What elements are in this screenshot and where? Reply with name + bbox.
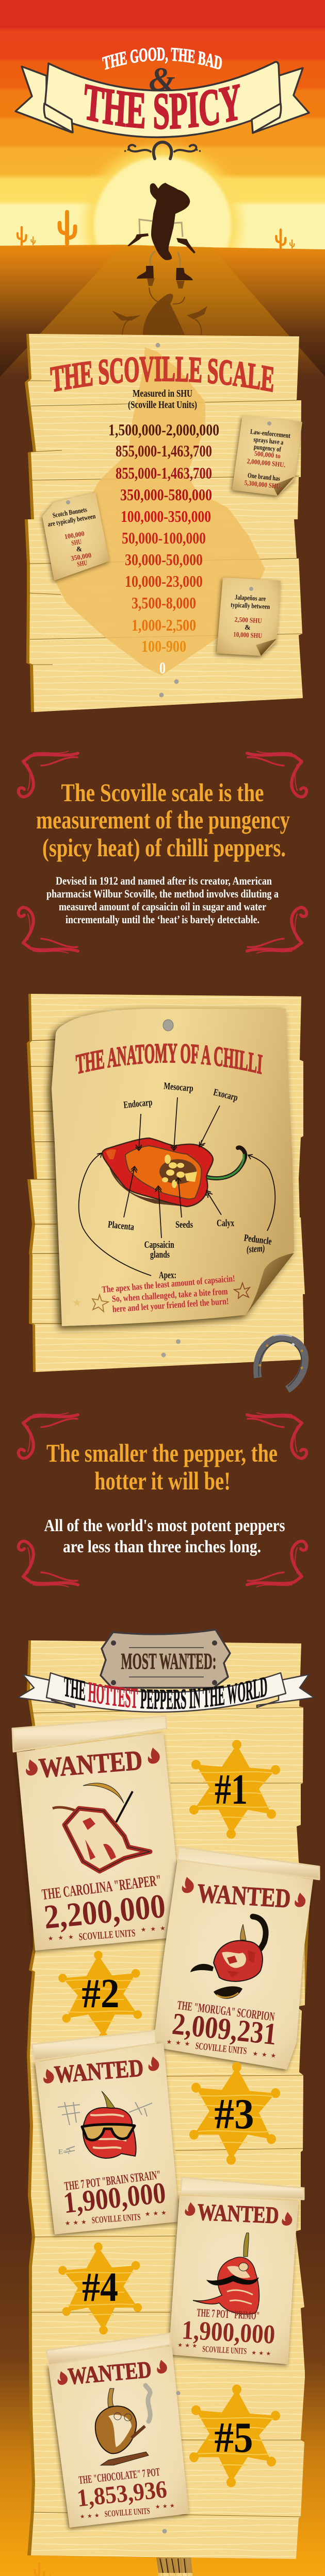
badge: number 3: #3 bbox=[215, 2090, 254, 2138]
labels: (stem) bbox=[246, 1243, 265, 1255]
paragraph: pharmacist Wilbur Scoville, the method involves diluting a bbox=[46, 887, 279, 900]
scale values: 10,000-23,000 bbox=[125, 572, 203, 590]
icon: stars bbox=[73, 1283, 250, 1312]
labels: Exocarp bbox=[213, 1087, 239, 1104]
scale values: 100,000-350,000 bbox=[121, 507, 211, 526]
poster: Chocolate 7 Pot bbox=[46, 2333, 189, 2528]
subheading: Measured in SHU bbox=[133, 388, 192, 399]
heading bbox=[36, 778, 290, 862]
note: Jalapenos: & bbox=[245, 623, 251, 631]
note: law-enforcement sprays bbox=[232, 416, 302, 496]
poster: 7 Pot Primo: WANTED bbox=[197, 2199, 280, 2228]
scale values: 30,000-50,000 bbox=[125, 550, 203, 569]
panel: most wanted wooden sign bbox=[11, 1629, 320, 2559]
nails bbox=[162, 2391, 181, 2534]
labels bbox=[107, 1081, 272, 1281]
note: Jalapenos: typically between bbox=[231, 601, 270, 611]
chilli watermark bbox=[55, 347, 265, 675]
paragraph bbox=[44, 1516, 285, 1556]
icon: cacti on the horizon bbox=[18, 212, 294, 248]
badge: number 4 bbox=[58, 2243, 142, 2334]
apex note: So, when challenged, take a bite from bbox=[111, 1286, 228, 1304]
poster: Moruga Scorpion bbox=[153, 1847, 319, 2070]
pin bbox=[163, 1020, 173, 1031]
badge: number 3 bbox=[189, 2062, 280, 2165]
note: Scotch Bonnets: SHU bbox=[71, 537, 83, 547]
scale values: 1,000-2,500 bbox=[132, 616, 196, 634]
ribbon bbox=[15, 62, 309, 137]
note: Scotch Bonnets: are typically between bbox=[47, 512, 96, 528]
labels: Mesocarp bbox=[163, 1081, 194, 1094]
note: law-enforcement sprays: 2,000,000 SHU. bbox=[247, 457, 286, 469]
paragraph: incrementally until the ‘heat’ is barely detectable. bbox=[66, 913, 259, 926]
paragraph: All of the world's most potent peppers bbox=[44, 1516, 285, 1535]
note: Scotch Bonnets bbox=[42, 493, 109, 581]
scale values: 1,500,000-2,000,000 bbox=[108, 420, 219, 439]
labels: Calyx bbox=[217, 1218, 234, 1229]
note: law-enforcement sprays: pungency of bbox=[253, 443, 282, 453]
poster: Carolina Reaper: WANTED bbox=[38, 1744, 143, 1784]
paragraph: measured amount of capsaicin oil in sugar and water bbox=[59, 900, 266, 913]
panel: Scoville scale wooden sign bbox=[25, 334, 303, 712]
poster: Chocolate 7 Pot: ★★★ bbox=[79, 2512, 100, 2520]
illustration: brain strain chilli with glasses bbox=[58, 2091, 152, 2158]
scale values: 855,000-1,463,700 bbox=[116, 464, 212, 482]
illustration: reaper chilli bbox=[53, 1783, 150, 1871]
poster: Brain Strain: WANTED bbox=[53, 2054, 144, 2089]
poster: Carolina Reaper: ★★★ bbox=[140, 1924, 166, 1934]
poster: Brain Strain: THE 7 POT "BRAIN STRAIN" bbox=[63, 2168, 161, 2193]
badge: number 5 bbox=[189, 2384, 280, 2487]
poster: Moruga Scorpion: SCOVILLE UNITS bbox=[195, 2041, 247, 2057]
apex note: here and let your friend feel the burn! bbox=[112, 1296, 229, 1314]
subheading bbox=[128, 388, 197, 411]
labels: Endocarp bbox=[123, 1097, 153, 1111]
main title: THE SPICY bbox=[85, 83, 240, 130]
labels: Apex: bbox=[159, 1270, 176, 1281]
nails bbox=[161, 1340, 181, 1357]
title banner bbox=[14, 47, 310, 160]
chilli cowboy shadow bbox=[112, 278, 207, 335]
text block: smaller the pepper bbox=[19, 1413, 306, 1587]
poster: Chocolate 7 Pot: WANTED bbox=[67, 2356, 153, 2389]
poster: Moruga Scorpion: WANTED bbox=[197, 1879, 291, 1914]
poster: 7 Pot Primo: THE 7 POT "PRIMO" bbox=[197, 2306, 260, 2322]
labels: glands bbox=[150, 1249, 170, 1260]
badge: number 1 bbox=[189, 1740, 280, 1839]
paragraph bbox=[46, 874, 279, 926]
scale values: 100-900 bbox=[141, 637, 186, 655]
labels: Seeds bbox=[175, 1219, 193, 1230]
ampersand: & bbox=[149, 61, 175, 98]
scale values: 50,000-100,000 bbox=[122, 529, 206, 547]
poster: 7 Pot Primo: 1,900,000 bbox=[181, 2315, 276, 2350]
poster: 7 Pot Primo: SCOVILLE UNITS bbox=[202, 2344, 247, 2356]
apex note: The apex has the least amount of capsaicin! bbox=[102, 1273, 235, 1295]
labels: Peduncle bbox=[243, 1232, 272, 1247]
badge: number 1: #1 bbox=[215, 1766, 248, 1814]
note: Scotch Bonnets: 100,000 bbox=[64, 530, 85, 540]
labels: Capsaicin bbox=[144, 1240, 174, 1250]
sign post bbox=[156, 2557, 199, 2576]
illustration: primo chilli with moustache bbox=[193, 2233, 259, 2314]
frame ornaments bbox=[19, 751, 306, 953]
illustration: brain strain chilli with glasses: E=? bbox=[58, 2148, 71, 2156]
note: Scotch Bonnets: SHU bbox=[76, 558, 88, 568]
faint cactus bbox=[35, 2564, 52, 2576]
page curl bbox=[246, 1253, 294, 1315]
hanging sign bbox=[101, 1630, 230, 1688]
poster: 7 Pot Primo: ★★★ bbox=[251, 2349, 271, 2357]
illustration: chocolate chilli smoking bbox=[95, 2385, 150, 2465]
arrows bbox=[79, 1097, 275, 1276]
frame ornaments bbox=[19, 1413, 306, 1587]
note: Jalapenos: Jalapeños are bbox=[235, 593, 266, 603]
horseshoe ornament bbox=[125, 142, 200, 159]
poster: Moruga Scorpion: ★★★ bbox=[166, 2038, 190, 2047]
poster: Moruga Scorpion: ★★★ bbox=[252, 2050, 277, 2059]
icon: horseshoe bbox=[257, 1335, 305, 1389]
heading bbox=[46, 1438, 278, 1495]
scale values: 0 bbox=[159, 658, 166, 677]
chilli cowboy silhouette bbox=[127, 183, 196, 280]
scale values: 855,000-1,463,700 bbox=[116, 442, 212, 460]
note: law-enforcement sprays: Law-enforcement bbox=[250, 428, 291, 439]
note: Scotch Bonnets: 350,000 bbox=[70, 551, 92, 562]
note: Scotch Bonnets: & bbox=[76, 545, 82, 553]
heading: hotter it will be! bbox=[94, 1466, 231, 1495]
labels: Placenta bbox=[107, 1219, 135, 1233]
scale values: 3,500-8,000 bbox=[132, 594, 196, 612]
wood planks bbox=[27, 1640, 310, 2559]
paragraph: are less than three inches long. bbox=[63, 1537, 261, 1556]
note: law-enforcement sprays: 500,000 to bbox=[254, 449, 281, 460]
poster: Carolina Reaper: ★★★ bbox=[47, 1933, 74, 1942]
heading: THE ANATOMY OF A CHILLI bbox=[75, 1044, 263, 1075]
paragraph: Devised in 1912 and named after its creator, American bbox=[56, 874, 272, 887]
road bbox=[0, 246, 325, 377]
nails bbox=[156, 343, 178, 698]
poster: Brain Strain: ★★★ bbox=[64, 2218, 87, 2227]
note: Jalapenos bbox=[217, 578, 281, 656]
background: desert sky bbox=[0, 0, 325, 252]
poster: Chocolate 7 Pot: 1,853,936 bbox=[76, 2476, 168, 2512]
subtitle: THE GOOD, THE BAD bbox=[102, 47, 222, 70]
poster: 7 Pot Primo bbox=[169, 2177, 304, 2364]
poster: Chocolate 7 Pot: SCOVILLE UNITS bbox=[104, 2506, 150, 2519]
note: Jalapenos: 2,500 SHU bbox=[234, 616, 262, 624]
note: law-enforcement sprays: 5,300,000 SHU. bbox=[244, 479, 282, 490]
heading: The Scoville scale is the bbox=[61, 778, 264, 807]
badge: number 2 bbox=[58, 1951, 142, 2041]
illustration: scorpion chilli bbox=[190, 1917, 266, 1999]
ribbon heading bbox=[17, 1672, 315, 1713]
scale values bbox=[108, 420, 219, 677]
wood planks bbox=[27, 994, 305, 1372]
poster: Moruga Scorpion: 2,009,231 bbox=[171, 2007, 278, 2052]
scale values: 350,000-580,000 bbox=[120, 485, 212, 504]
wood planks bbox=[25, 334, 303, 712]
desert floor scene bbox=[0, 2557, 325, 2576]
sun bbox=[85, 148, 240, 302]
subheading: (Scoville Heat Units) bbox=[128, 399, 197, 411]
poster: Carolina Reaper: 2,200,000 bbox=[42, 1887, 167, 1936]
badge: number 5: #5 bbox=[215, 2414, 253, 2462]
poster: Carolina Reaper bbox=[12, 1716, 184, 1951]
note: law-enforcement sprays: One brand has bbox=[247, 471, 281, 482]
poster: Brain Strain bbox=[32, 2030, 180, 2234]
panel: anatomy of a chilli bbox=[27, 994, 308, 1393]
poster: Carolina Reaper: SCOVILLE UNITS bbox=[78, 1927, 136, 1943]
parchment bbox=[52, 1009, 294, 1326]
poster: Brain Strain: 1,900,000 bbox=[62, 2176, 167, 2219]
poster: Brain Strain: ★★★ bbox=[144, 2209, 167, 2217]
apex note bbox=[102, 1273, 235, 1314]
badge: number 4: #4 bbox=[82, 2265, 118, 2310]
badge: number 2: #2 bbox=[82, 1971, 120, 2016]
ribbon heading: THE HOTTEST PEPPERS IN THE WORLD bbox=[64, 1676, 267, 1709]
chilli cross-section bbox=[103, 1138, 245, 1207]
hanging sign: MOST WANTED: bbox=[121, 1649, 217, 1674]
poster: 7 Pot Primo: ★★★ bbox=[177, 2342, 198, 2349]
text block: what the Scoville scale is bbox=[19, 751, 306, 953]
poster: Chocolate 7 Pot: ★★★ bbox=[155, 2502, 175, 2510]
note: Scotch Bonnets: Scotch Bonnets bbox=[52, 505, 88, 519]
desert ground bbox=[0, 245, 325, 377]
poster: Chocolate 7 Pot: THE "CHOCOLATE" 7 POT bbox=[78, 2465, 160, 2486]
poster: Brain Strain: SCOVILLE UNITS bbox=[91, 2212, 141, 2225]
poster: Carolina Reaper: THE CAROLINA "REAPER" bbox=[41, 1872, 162, 1903]
heading: THE SCOVILLE SCALE bbox=[50, 357, 273, 393]
note: law-enforcement sprays: sprays have a bbox=[253, 435, 284, 446]
note: Jalapenos: 10,000 SHU bbox=[233, 631, 263, 639]
